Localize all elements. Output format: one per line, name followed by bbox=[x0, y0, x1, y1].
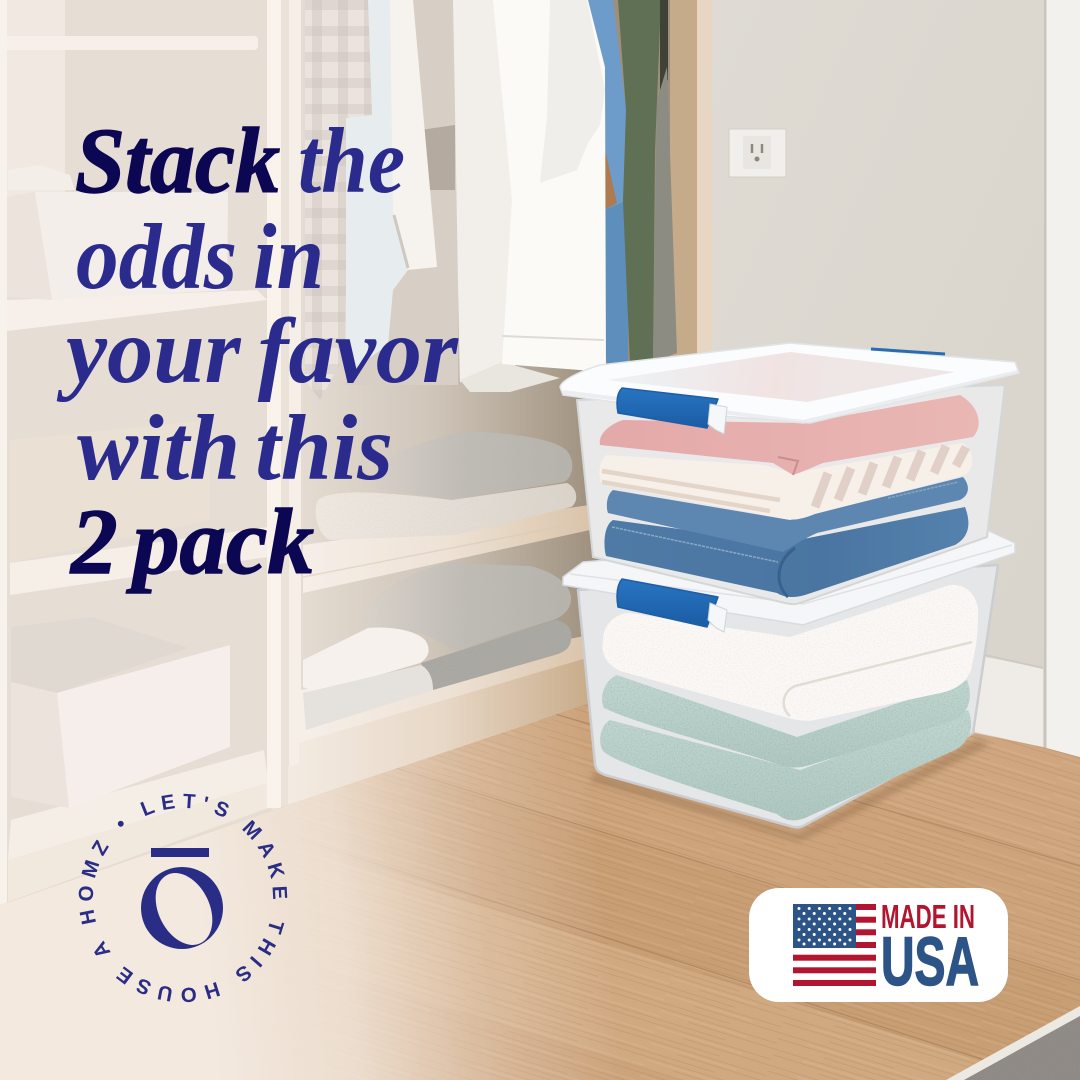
hanging clothes bbox=[305, 0, 677, 400]
clip bbox=[617, 579, 727, 632]
green garment bbox=[618, 0, 661, 365]
badge: made in USA bbox=[749, 888, 1008, 1002]
left bay back wall bbox=[0, 0, 272, 905]
upper storage bin bbox=[560, 343, 1019, 604]
heading line 4: with this bbox=[77, 397, 393, 500]
heading word: Stack: Stack bbox=[75, 110, 280, 213]
circular tagline: • LET'S MAKE THIS HOUSE A HOMZ bbox=[78, 794, 288, 1002]
label: made in: MADE IN bbox=[881, 898, 975, 935]
top cream towel bbox=[316, 483, 576, 540]
white fabric bin bbox=[11, 617, 230, 808]
wood floor bbox=[0, 703, 1080, 1080]
logo letter o bbox=[141, 867, 223, 949]
white towel lower bbox=[303, 665, 433, 730]
white towel top bbox=[303, 628, 429, 693]
folded towels on shelves bbox=[303, 432, 576, 730]
heading bbox=[56, 110, 459, 594]
heading line 5: 2 pack bbox=[69, 491, 314, 594]
icon: wall outlet bbox=[729, 129, 786, 177]
lower storage bin bbox=[563, 530, 1015, 842]
jeans top bbox=[607, 477, 968, 552]
pink sweater bbox=[600, 395, 979, 475]
bin body bbox=[578, 565, 998, 827]
plaid shirt bbox=[305, 0, 373, 400]
striped sweater bbox=[599, 443, 972, 520]
lid bbox=[563, 530, 1015, 625]
white shirt front bbox=[493, 0, 606, 372]
top grey towel bbox=[372, 432, 572, 500]
heading line 2: odds in bbox=[76, 206, 324, 309]
brand logo seal bbox=[78, 794, 288, 1002]
flag bbox=[793, 904, 876, 986]
shelves right bay bbox=[303, 505, 590, 593]
storage baskets bbox=[7, 165, 230, 808]
bin body bbox=[577, 385, 1005, 604]
lower grey towel bbox=[364, 563, 571, 650]
rug bbox=[946, 1006, 1080, 1080]
brown tag bbox=[588, 127, 617, 212]
heading line 3: your favor bbox=[56, 300, 459, 403]
green towel middle bbox=[602, 675, 970, 768]
label: USA: USA bbox=[881, 923, 979, 1000]
vertical panels bbox=[0, 0, 7, 905]
closet shelving bbox=[0, 0, 670, 905]
white shirt left bbox=[453, 0, 520, 382]
logo bar bbox=[151, 848, 209, 857]
green towel bottom bbox=[600, 710, 971, 820]
grey garment right bbox=[653, 67, 677, 362]
lid bbox=[560, 343, 1019, 423]
grey garment bbox=[345, 0, 458, 385]
white cuff shirt bbox=[390, 0, 437, 270]
pale blue shirt bbox=[345, 0, 408, 375]
woven basket bbox=[10, 420, 210, 563]
clip bbox=[617, 388, 727, 434]
shelves left bay bbox=[5, 36, 258, 50]
right bay back wall bbox=[290, 0, 670, 720]
jeans bottom bbox=[604, 507, 968, 597]
lower under grey towel bbox=[421, 620, 571, 690]
top basket bbox=[7, 165, 228, 300]
baseboard bbox=[975, 655, 1043, 747]
bin shadow bbox=[590, 738, 990, 842]
white towel bbox=[602, 585, 978, 721]
blue denim shirt bbox=[588, 0, 628, 369]
heading word: the: the bbox=[298, 110, 405, 213]
